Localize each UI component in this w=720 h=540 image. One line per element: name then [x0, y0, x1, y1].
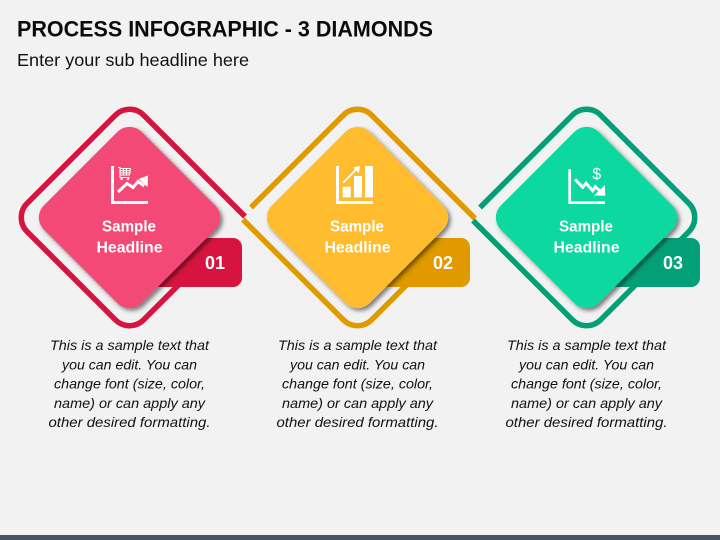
- number badge 02: [368, 238, 470, 287]
- title: PROCESS INFOGRAPHIC - 3 DIAMONDS: [17, 17, 433, 42]
- headline 2: Sample: [330, 219, 384, 236]
- icon: falling chart with dollar: [570, 166, 605, 203]
- number badge 03: [598, 238, 700, 287]
- text block 1: other desired formatting.: [48, 414, 210, 430]
- panel: step 2 diamond: [243, 109, 475, 326]
- text block 1: you can edit. You can: [61, 356, 197, 372]
- number 02: 02: [433, 253, 453, 273]
- icon: falling chart with dollar: $: [592, 166, 601, 183]
- headline 2: Headline: [324, 240, 391, 257]
- number 01: 01: [205, 253, 225, 273]
- headline 3: Sample: [559, 219, 613, 236]
- outer ring 1: [21, 109, 245, 326]
- text block 2: This is a sample text that: [278, 337, 438, 353]
- icon: bar chart with arrow: [338, 166, 373, 202]
- text block 2: other desired formatting.: [276, 414, 438, 430]
- subtitle: Enter your sub headline here: [17, 50, 249, 70]
- text block 3: This is a sample text that: [507, 337, 667, 353]
- text block 3: you can edit. You can: [518, 356, 654, 372]
- text block 1: name) or can apply any: [54, 395, 206, 411]
- inner diamond 2: [267, 127, 448, 308]
- text block 1: change font (size, color,: [54, 376, 205, 392]
- headline 1: Headline: [96, 240, 163, 257]
- text block 3: change font (size, color,: [511, 376, 662, 392]
- text block 3: name) or can apply any: [511, 395, 663, 411]
- outer ring 3: [473, 109, 695, 326]
- text block 3: other desired formatting.: [506, 414, 668, 430]
- text block 2: you can edit. You can: [289, 356, 425, 372]
- panel: step 1 diamond: [21, 109, 245, 326]
- panel: step 3 diamond: [473, 109, 700, 326]
- number badge 01: [140, 238, 242, 287]
- headline 3: Headline: [554, 240, 620, 257]
- text block 2: name) or can apply any: [282, 395, 434, 411]
- inner diamond 3: [496, 127, 677, 308]
- inner diamond 1: [39, 127, 220, 308]
- text block 1: This is a sample text that: [50, 337, 210, 353]
- outer ring 2: [243, 109, 475, 326]
- number 03: 03: [663, 253, 683, 273]
- icon: cart and rising chart: [112, 166, 148, 202]
- text block 2: change font (size, color,: [282, 376, 433, 392]
- headline 1: Sample: [102, 219, 156, 236]
- footer bar: [0, 535, 720, 540]
